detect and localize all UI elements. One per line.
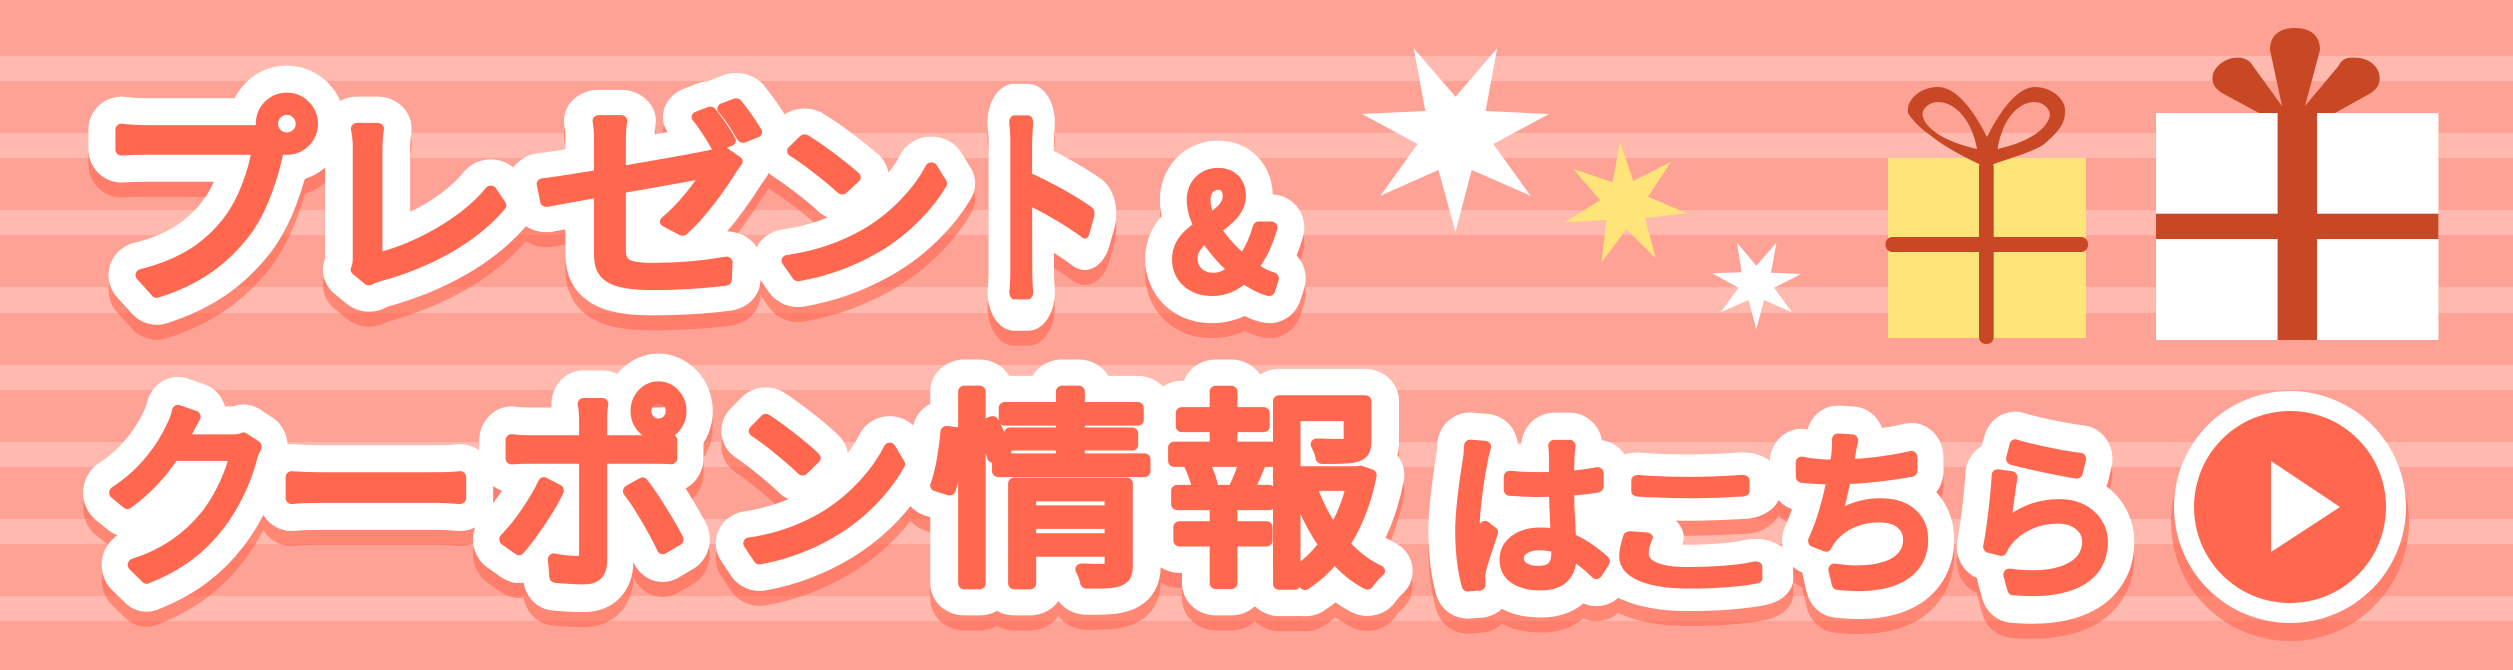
second line white outline: ら	[1959, 381, 2127, 634]
heading white outline: ト	[966, 42, 1112, 348]
icon: yellow gift box	[1886, 87, 2088, 344]
second line shadow: ン	[722, 357, 914, 624]
button: round play arrow	[2171, 391, 2409, 641]
second line orange letters: ポ	[493, 321, 695, 631]
icon: yellow sparkle	[1565, 142, 1687, 262]
heading shadow: プ	[92, 41, 316, 364]
heading orange letters: プ	[92, 26, 316, 349]
second line orange letters: ら	[1959, 381, 2127, 634]
heading shadow: &	[1173, 126, 1275, 347]
second line shadow: ら	[1959, 396, 2127, 649]
heading white outline: レ	[310, 47, 520, 333]
heading orange letters: ト	[966, 42, 1112, 348]
heading shadow: ゼ	[532, 52, 766, 352]
second line white outline: ン	[722, 342, 914, 609]
second line shadow: 報	[1165, 339, 1385, 642]
heading orange letters: ゼ	[532, 37, 766, 337]
heading: first line	[92, 26, 1275, 364]
icon: white gift box	[2156, 28, 2438, 340]
second line shadow: 情	[930, 340, 1154, 643]
heading white outline: ゼ	[532, 37, 766, 337]
second line orange letters: 情	[930, 325, 1154, 628]
second line white outline: ー	[270, 324, 482, 631]
heading shadow	[92, 41, 1275, 364]
icon: large white sparkle	[1362, 48, 1549, 232]
heading shadow: ン	[760, 79, 956, 340]
second line white outline: こ	[1592, 415, 1788, 622]
second line orange letters: ク	[97, 343, 279, 626]
heading orange letters: レ	[310, 47, 520, 333]
second line white outline: 報	[1165, 324, 1385, 627]
second line white outline: ク	[97, 343, 279, 626]
second line shadow: ー	[270, 339, 482, 646]
second line white outline: 情	[930, 325, 1154, 628]
icon: small white sparkle	[1712, 243, 1801, 329]
second line orange letters: ち	[1783, 374, 1947, 629]
heading orange letters: ン	[760, 64, 956, 325]
second line shadow: こ	[1592, 430, 1788, 637]
heading white outline: プ	[92, 26, 316, 349]
second line orange letters: ー	[270, 324, 482, 631]
second line orange letters	[97, 321, 2127, 634]
second line white outline: は	[1442, 379, 1612, 629]
heading orange letters	[92, 26, 1275, 349]
second line shadow	[97, 336, 2127, 649]
second line shadow: は	[1442, 394, 1612, 644]
second line white outline	[97, 321, 2127, 634]
second line white outline: ポ	[493, 321, 695, 631]
heading: second line	[97, 321, 2127, 649]
heading orange letters: &	[1173, 111, 1275, 332]
heading white outline	[92, 26, 1275, 349]
heading shadow: ト	[966, 57, 1112, 363]
heading shadow: レ	[310, 62, 520, 348]
second line white outline: ち	[1783, 374, 1947, 629]
second line orange letters: ン	[722, 342, 914, 609]
second line shadow: ク	[97, 358, 279, 641]
second line orange letters: は	[1442, 379, 1612, 629]
heading white outline: &	[1173, 111, 1275, 332]
second line shadow: ち	[1783, 389, 1947, 644]
second line orange letters: 報	[1165, 324, 1385, 627]
second line orange letters: こ	[1592, 415, 1788, 622]
second line shadow: ポ	[493, 336, 695, 646]
heading white outline: ン	[760, 64, 956, 325]
